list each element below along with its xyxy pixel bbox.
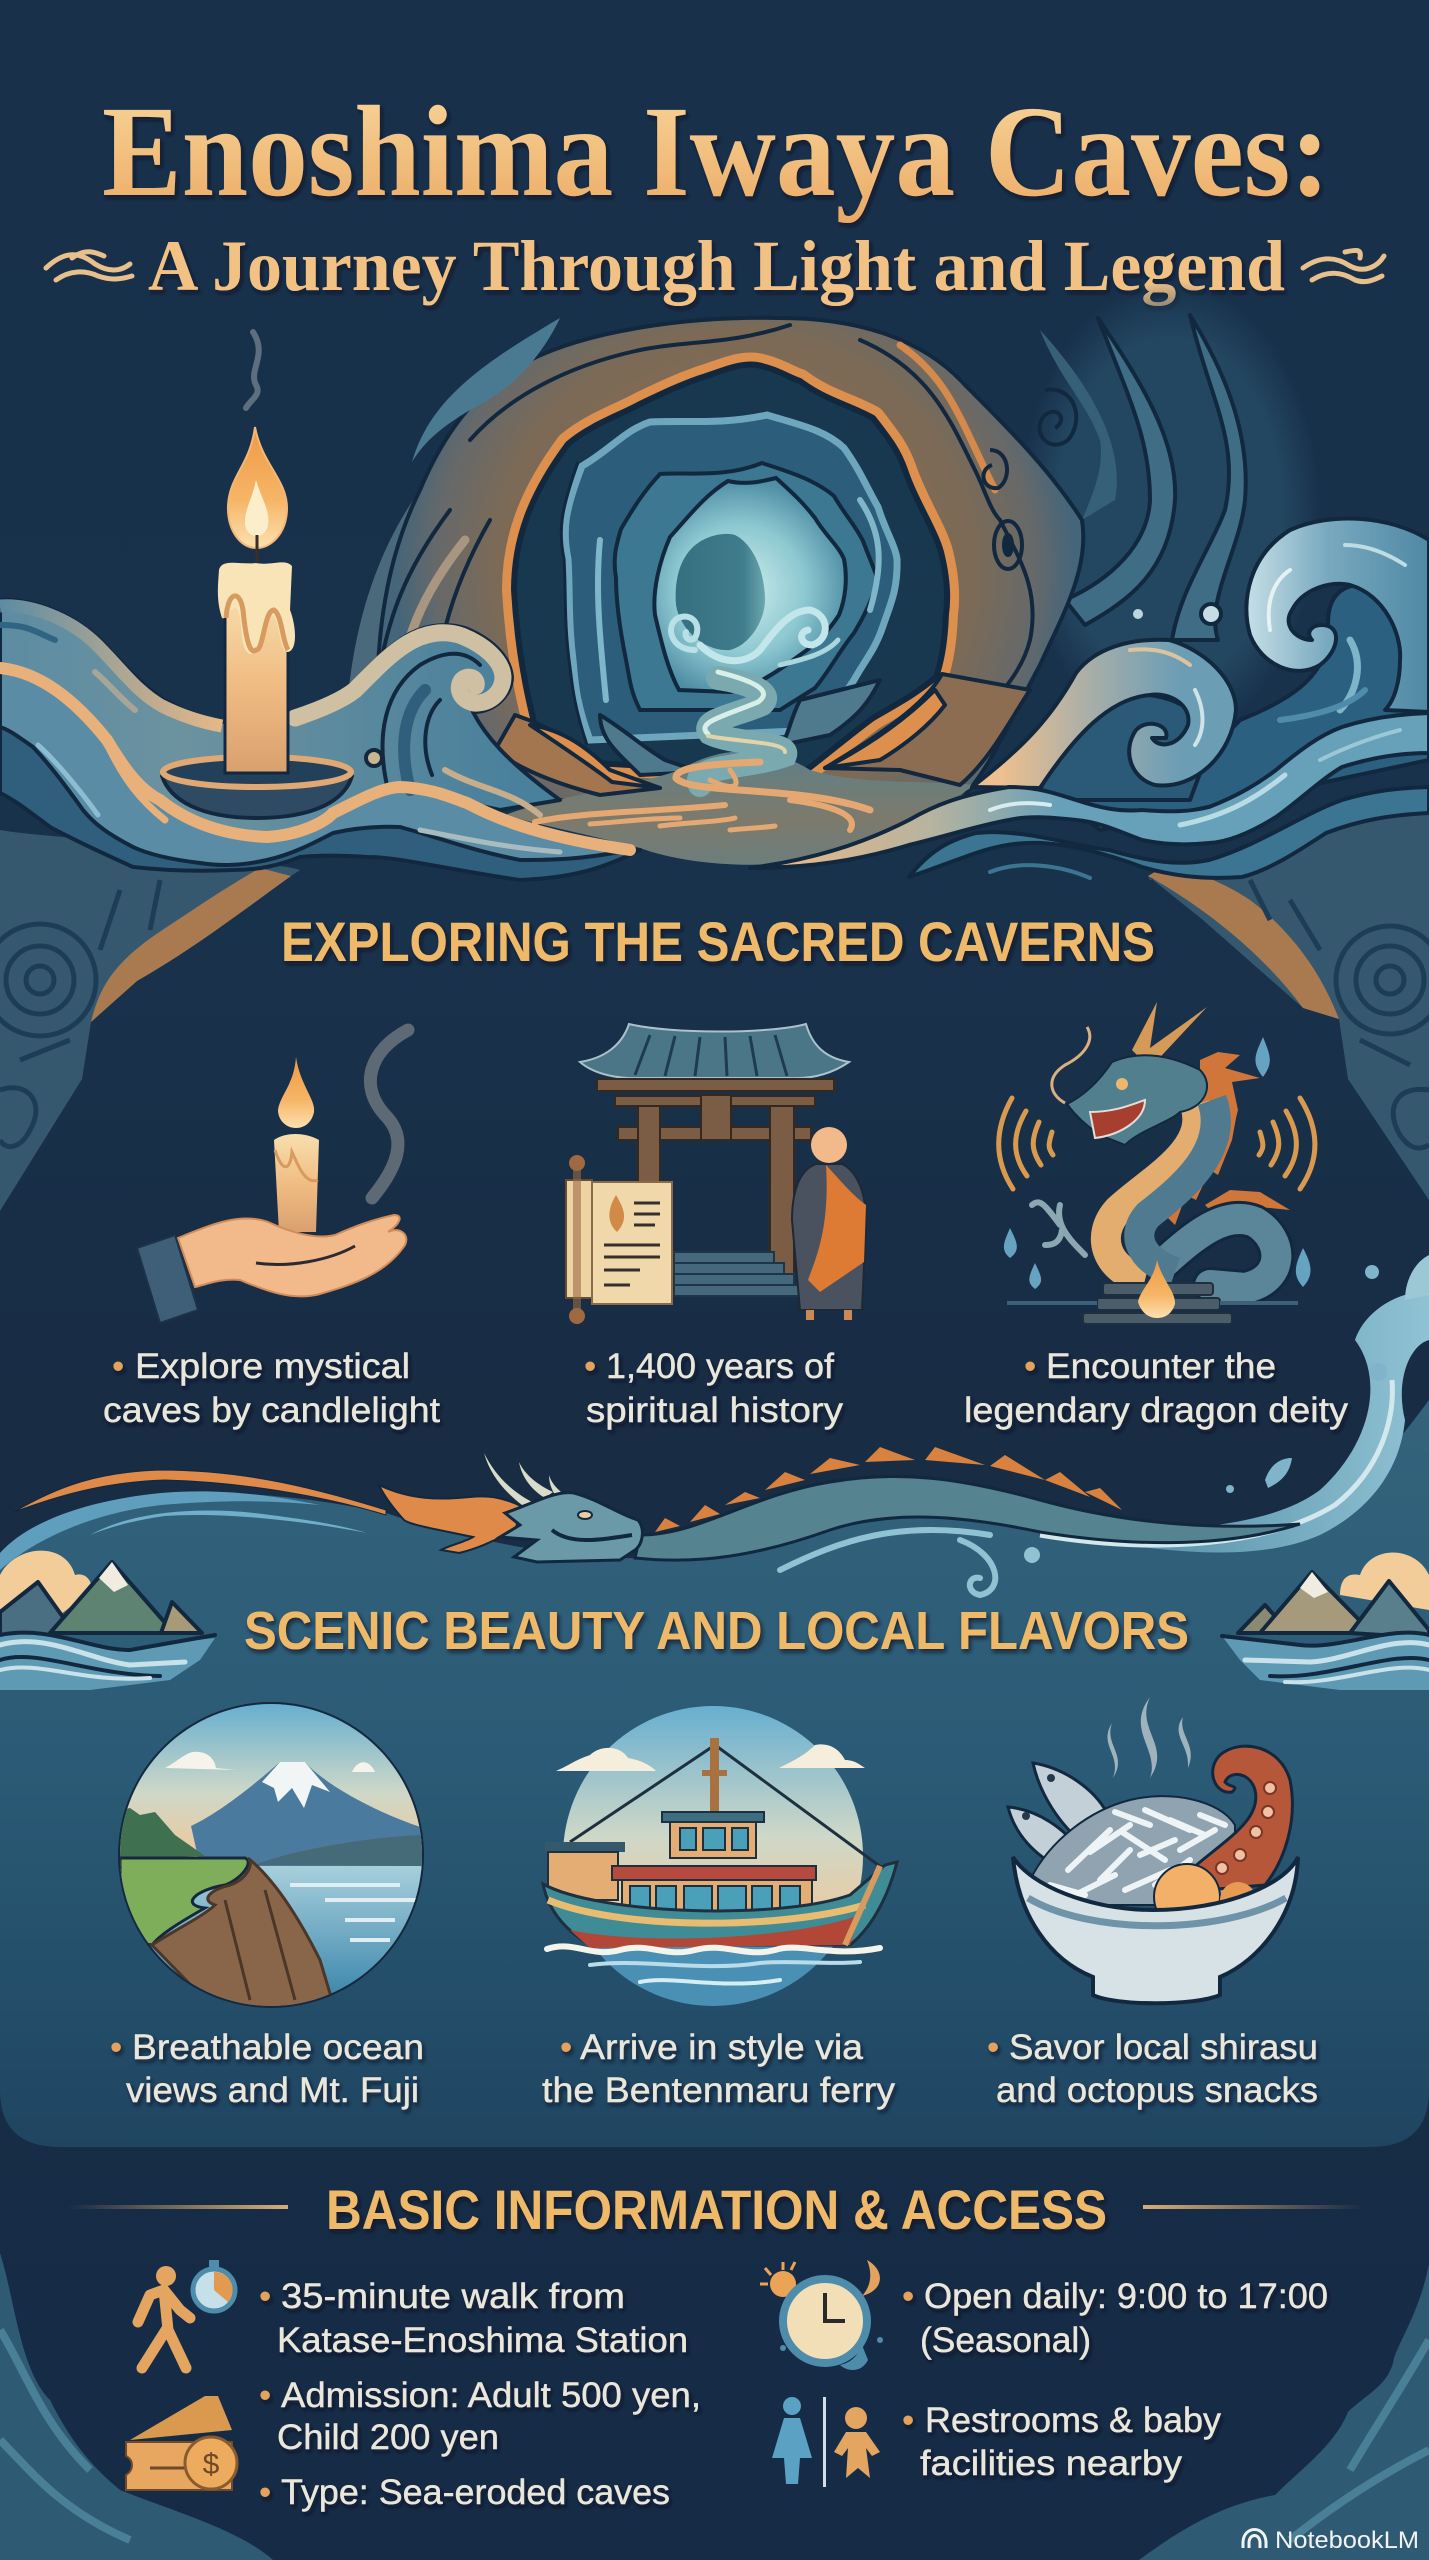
cave legs: [495, 674, 1030, 795]
title: A Journey Through Light and Legend: [148, 226, 1285, 306]
panel: scenic beauty background: [0, 1400, 1429, 2147]
fish: [1033, 1763, 1107, 1845]
back spines: [1165, 1052, 1260, 1225]
text: breathable ocean views: •: [110, 2028, 122, 2067]
text: encounter dragon: [964, 1347, 1349, 1430]
rock strata lines: [375, 325, 1033, 740]
text: 1,400 years: 1,400 years of: [606, 1347, 834, 1386]
mid spiral base: [1040, 695, 1207, 800]
icon: ticket and coin: $: [203, 2448, 220, 2481]
candle: [274, 1134, 319, 1232]
text: savor local shirasu: and octopus snacks: [996, 2071, 1318, 2110]
title: [102, 80, 1330, 306]
heading: exploring the sacred caverns: EXPLORING THE SACRED CAVERNS: [281, 910, 1155, 973]
text: admission: •: [259, 2376, 271, 2415]
horns: [1132, 1002, 1207, 1068]
band highlights: [990, 649, 1400, 878]
blue leaf strand: [412, 318, 560, 462]
inner swirls: [671, 610, 838, 665]
text: breathable ocean views: Breathable ocean: [132, 2028, 424, 2067]
text: arrive in style: [542, 2028, 896, 2110]
wax cap: [218, 562, 295, 654]
illustration: corner rock left: [0, 830, 300, 1211]
middle band: [0, 668, 630, 865]
mid spiral: [972, 640, 1236, 788]
text: breathable ocean views: views and Mt. Fuji: [126, 2071, 419, 2110]
flame: [228, 427, 287, 548]
claw: [1032, 1202, 1085, 1255]
flame: [278, 1057, 314, 1128]
dragon tail: [14, 1470, 386, 1515]
outer left strands: [345, 360, 560, 800]
band B: [909, 787, 1429, 878]
illustration: right waves: [750, 519, 1429, 878]
small flame: [1138, 1260, 1175, 1318]
text: explore mystical caves: [103, 1347, 440, 1430]
holder: [162, 776, 352, 818]
text: explore mystical caves: •: [112, 1347, 124, 1386]
sea waves: [547, 1946, 880, 1984]
text: savor local shirasu: Savor local shirasu: [1009, 2028, 1318, 2067]
main cabin: [612, 1866, 816, 1880]
icon: clock with sun and moon: [760, 2260, 883, 2370]
text: 1,400 years: •: [584, 1347, 596, 1386]
base water behind curl: [1060, 584, 1429, 830]
icon: right title swirl: [1303, 250, 1384, 282]
text: breathable ocean views: [110, 2028, 424, 2110]
cave ring B: [565, 415, 897, 740]
heading: basic information and access: [68, 2178, 1363, 2241]
orange band: [0, 668, 630, 850]
text: open daily: Open daily: 9:00 to 17:00: [924, 2277, 1328, 2316]
cave ring C: [615, 463, 878, 710]
cave floor: [505, 751, 975, 865]
upper deck: [662, 1812, 764, 1822]
icon: bentenmaru ferry: [543, 1700, 897, 2015]
illustration: bottom right rock: [1139, 2264, 1429, 2560]
coil: [1165, 1219, 1276, 1288]
text: savor local shirasu: [987, 2028, 1318, 2110]
droplets: [1004, 1037, 1311, 1289]
text: 1,400 years: spiritual history: [586, 1391, 844, 1430]
cave ring D: [654, 478, 846, 692]
head: [1067, 1055, 1207, 1145]
text: explore mystical caves: Explore mystical: [135, 1347, 410, 1386]
icon: restroom and baby: [772, 2397, 880, 2487]
main wave: [1005, 1292, 1429, 1553]
illustration: bottom left rock: [0, 2253, 273, 2560]
mast: [710, 1738, 719, 1812]
band A: [750, 713, 1429, 868]
watermark: notebooklm: NotebookLM: [1275, 2527, 1419, 2554]
inner spiral rings: [0, 625, 540, 815]
right rock trunks: [1020, 280, 1320, 740]
icon: shirasu bowl: [1008, 1697, 1298, 2003]
dragon mane: [379, 1485, 523, 1553]
icon: walker and stopwatch: [138, 2260, 235, 2368]
text: restrooms: facilities nearby: [920, 2444, 1183, 2483]
whisker: [1052, 1027, 1090, 1103]
heading: basic information and access: BASIC INFORMATION & ACCESS: [326, 2178, 1107, 2241]
lower band: [0, 660, 640, 880]
cream crest left: [0, 606, 222, 726]
sliced toppings: [1154, 1864, 1220, 1930]
candle body: [225, 590, 288, 773]
dragon body: [635, 1476, 1300, 1560]
dragon spines: [655, 1447, 1122, 1532]
text: encounter dragon: Encounter the: [1046, 1347, 1276, 1386]
circle: [560, 1700, 870, 2015]
icon: left mountains: [0, 1551, 215, 1690]
illustration: corner rock right: [1148, 800, 1429, 1200]
text: encounter dragon: •: [1024, 1347, 1036, 1386]
dragon horns: [484, 1453, 572, 1505]
cream crest and spiral: [295, 633, 503, 718]
text: walk from station: 35-minute walk from: [281, 2277, 625, 2316]
scroll: [566, 1180, 592, 1298]
bowl: [1013, 1857, 1298, 2003]
heading: scenic beauty: SCENIC BEAUTY AND LOCAL FLAVORS: [244, 1601, 1189, 1661]
text: walk from station: Katase-Enoshima Station: [277, 2321, 688, 2360]
wave highlights: [38, 745, 560, 852]
monk: [811, 1127, 847, 1163]
rigging: [570, 1745, 885, 1870]
mouth: [1090, 1100, 1145, 1138]
cave floor rocks: [600, 680, 880, 775]
shirasu pile: [1030, 1796, 1235, 1905]
text: admission: [259, 2376, 701, 2457]
panel edge wave: [0, 1491, 320, 1570]
stone base: [1083, 1283, 1232, 1324]
steam: [1108, 1697, 1191, 1778]
cave opening: [676, 534, 765, 650]
bubbles: [1201, 604, 1221, 624]
text: explore mystical caves: caves by candlelight: [103, 1391, 440, 1430]
smoke: [246, 332, 259, 408]
text: open daily: •: [902, 2277, 914, 2316]
icon: mt fuji circle: [110, 1700, 440, 2015]
text: admission: Admission: Adult 500 yen,: [281, 2376, 701, 2415]
clouds: [556, 1744, 865, 1771]
brown rock arch: [377, 318, 1083, 800]
curl highlights: [1269, 545, 1405, 720]
swirl: [780, 1530, 995, 1595]
text: 1,400 years: [584, 1347, 844, 1430]
hand: [178, 1215, 406, 1296]
steps: [674, 1252, 802, 1296]
lintels and posts: [597, 1079, 834, 1296]
icon: dragon deity: [999, 1002, 1315, 1324]
text: open daily: (Seasonal): [920, 2321, 1091, 2360]
text: restrooms: •: [902, 2401, 914, 2440]
text: admission: Child 200 yen: [277, 2418, 499, 2457]
belly: [1106, 1105, 1197, 1280]
text: open daily: [902, 2277, 1328, 2360]
bubble: [366, 750, 382, 766]
text: walk from station: •: [259, 2277, 271, 2316]
hull: [543, 1862, 897, 1945]
orange inner edge: [514, 364, 947, 775]
dragon head: [500, 1493, 642, 1562]
text: type: •: [259, 2473, 271, 2512]
icon: ticket and coin: [126, 2396, 237, 2490]
sound arcs: [999, 1098, 1315, 1189]
left cabin: [545, 1842, 625, 1852]
text: walk from station: [259, 2277, 688, 2360]
text: restrooms: Restrooms & baby: [925, 2401, 1222, 2440]
text: type: Type: Sea-eroded caves: [281, 2473, 670, 2512]
illustration: left waves: [0, 600, 640, 880]
smoke: [370, 1030, 408, 1198]
icon: hand holding candle: [137, 1030, 408, 1323]
text: arrive in style: the Bentenmaru ferry: [542, 2071, 896, 2110]
illustration: wave divider with dragon: [0, 1255, 1429, 1595]
text: arrive in style: Arrive in style via: [580, 2028, 864, 2067]
back wave: [0, 600, 560, 837]
text: arrive in style: •: [560, 2028, 572, 2067]
rock spirals: [983, 390, 1076, 569]
body: [1139, 1100, 1216, 1272]
cave interior: [514, 364, 947, 775]
title: Enoshima Iwaya Caves:: [102, 80, 1330, 224]
octopus tentacle: [1193, 1746, 1292, 1890]
icon: left title swirl: [46, 252, 132, 280]
roof: [580, 1024, 849, 1078]
illustration: cave: [345, 280, 1320, 865]
right big curl: [1246, 519, 1429, 712]
text: restrooms: [902, 2401, 1222, 2483]
icon: torii gate, scroll and monk: [566, 1024, 866, 1324]
text: encounter dragon: legendary dragon deity: [964, 1391, 1349, 1430]
icon: large candle: [162, 332, 352, 818]
cave river: [535, 672, 870, 830]
text: savor local shirasu: •: [987, 2028, 999, 2067]
icon: right mountains: [1222, 1552, 1429, 1690]
cuff: [137, 1235, 198, 1323]
